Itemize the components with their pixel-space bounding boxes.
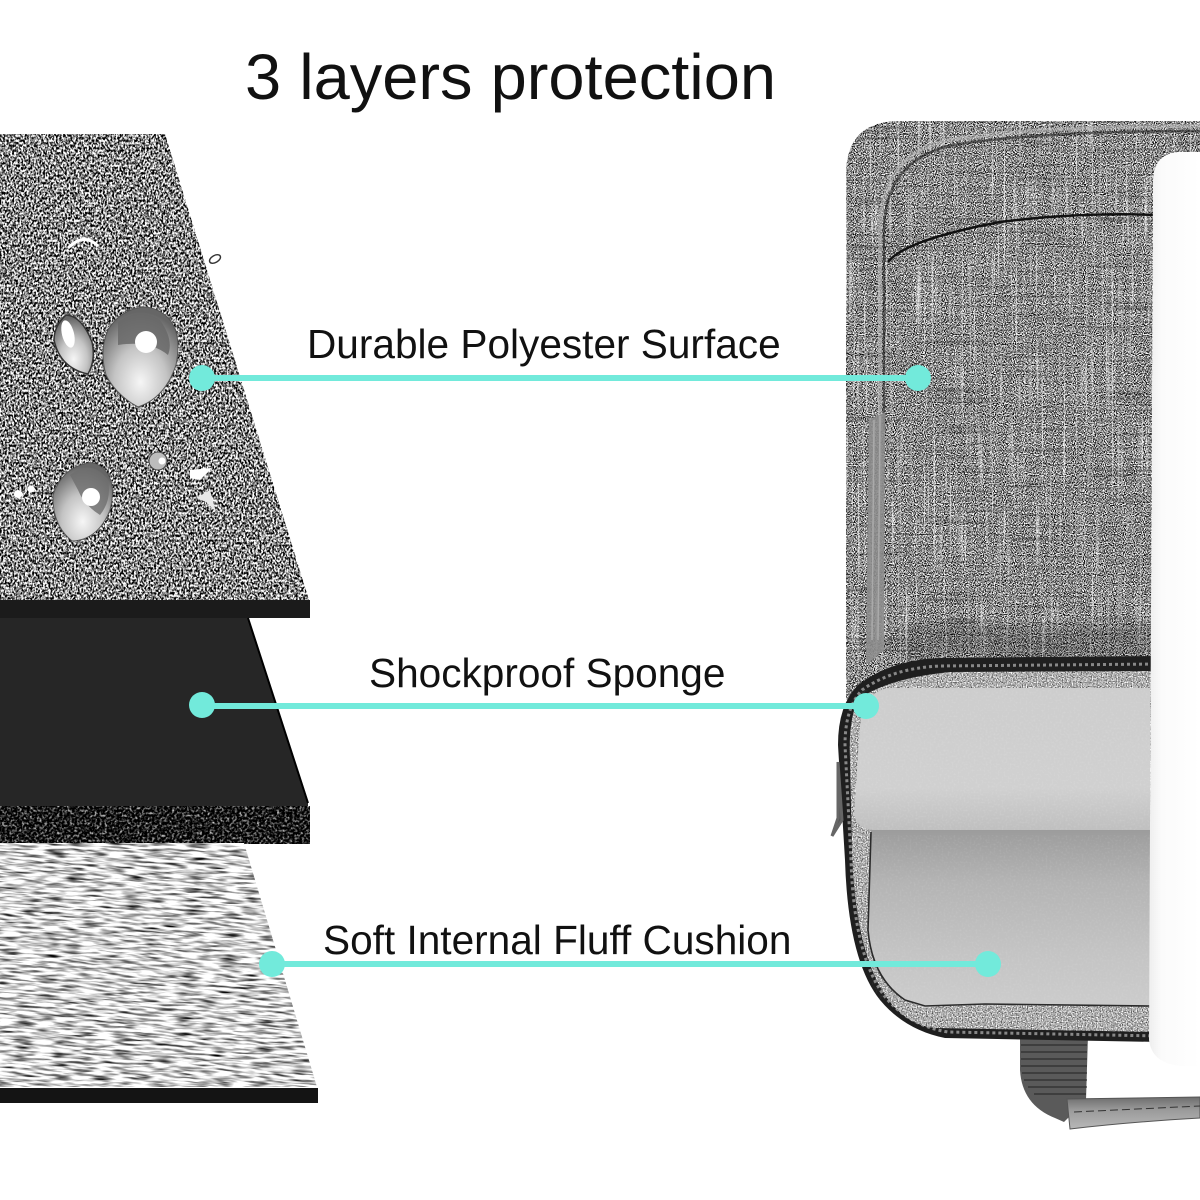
label: sponge: Shockproof Sponge bbox=[369, 650, 725, 696]
strap and handle bbox=[1020, 1035, 1200, 1129]
label: fluff: Soft Internal Fluff Cushion bbox=[323, 917, 791, 963]
layer 1: polyester surface sample bbox=[0, 134, 310, 618]
grey linen shell bbox=[846, 121, 1200, 701]
callout line: polyester bbox=[189, 365, 931, 391]
open compartment with zip and lining bbox=[832, 656, 1165, 1042]
laptop edge bbox=[1149, 152, 1200, 1066]
laptop sleeve illustration bbox=[832, 121, 1200, 1129]
title: 3 layers protection bbox=[245, 41, 776, 113]
layer 2: shockproof sponge sample bbox=[0, 618, 310, 844]
label: polyester: Durable Polyester Surface bbox=[307, 321, 781, 367]
callout line: fluff bbox=[259, 951, 1001, 977]
layer 3: internal fluff sample bbox=[0, 843, 318, 1103]
callout line: sponge bbox=[189, 692, 879, 719]
water droplets bbox=[14, 239, 222, 541]
upper fluff cushion bbox=[854, 688, 1150, 830]
lower fluff cushion bbox=[868, 830, 1150, 1008]
